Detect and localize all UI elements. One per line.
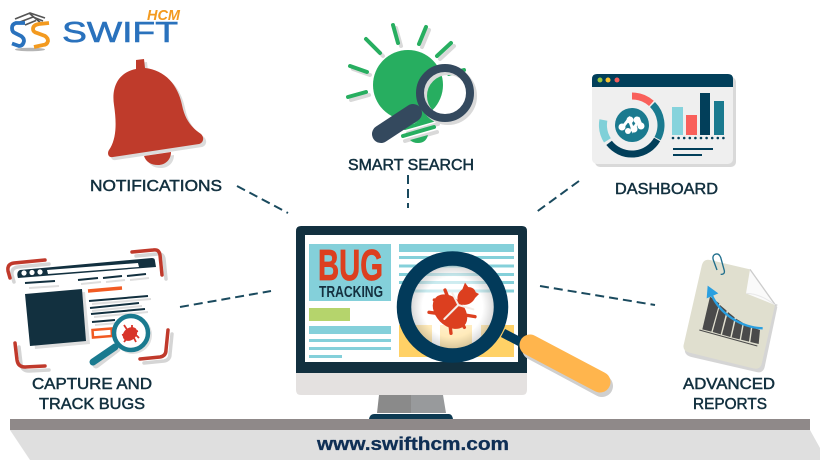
label: advanced reports: REPORTS bbox=[693, 396, 767, 413]
donut chart bbox=[603, 96, 661, 154]
label: smart search: SMART SEARCH bbox=[348, 157, 474, 174]
browser image block bbox=[30, 292, 90, 349]
website url: www.swifthcm.com bbox=[316, 434, 509, 454]
label: capture and track bugs: TRACK BUGS bbox=[39, 396, 145, 413]
label: advanced reports bbox=[683, 376, 775, 413]
large magnifier with bug bbox=[404, 258, 602, 386]
label: advanced reports: ADVANCED bbox=[683, 376, 775, 393]
label: dashboard: DASHBOARD bbox=[615, 181, 718, 198]
icon: dashboard window bbox=[592, 74, 736, 167]
screen: bug tracking banner bbox=[309, 241, 391, 301]
icon: advanced reports document bbox=[683, 254, 777, 372]
logo icon bbox=[12, 13, 49, 51]
desk footer band bbox=[10, 419, 820, 460]
logo: Swift HCM bbox=[12, 7, 180, 51]
dashed connector: dashboard bbox=[535, 181, 579, 213]
label: capture and track bugs: CAPTURE AND bbox=[32, 376, 152, 393]
corner brackets bbox=[12, 254, 172, 371]
icon: notification bell bbox=[108, 59, 206, 168]
monitor stand bbox=[377, 395, 411, 413]
monitor frame bbox=[296, 226, 527, 373]
dashed connector: reports bbox=[540, 286, 655, 305]
dashed connector: capture bbox=[180, 291, 271, 307]
screen: bug tracking banner: BUG bbox=[318, 241, 383, 290]
browser header bbox=[17, 258, 156, 278]
small magnifier with bug bbox=[93, 316, 152, 365]
screen: bug tracking banner: TRACKING bbox=[319, 284, 383, 301]
dashed connector: smart search bbox=[407, 175, 409, 208]
bar chart bbox=[672, 93, 724, 135]
logo HCM: HCM bbox=[147, 7, 180, 24]
paperclip bbox=[713, 254, 724, 274]
logo wordmark: SWIFT bbox=[62, 17, 178, 49]
magnifier lens bbox=[410, 264, 496, 350]
monitor bbox=[296, 226, 527, 419]
icon: smart search bulb and magnifier bbox=[348, 25, 473, 143]
screen: right content bbox=[399, 244, 514, 357]
growth arrow bbox=[712, 295, 763, 328]
label: capture and track bugs bbox=[32, 376, 152, 413]
screen: left content bbox=[309, 308, 391, 358]
dashed connector: notifications bbox=[237, 186, 288, 213]
icon: capture and track bugs bbox=[8, 250, 172, 371]
report bars bbox=[702, 297, 760, 344]
label: notifications: NOTIFICATIONS bbox=[90, 178, 222, 195]
bug bbox=[426, 283, 479, 336]
magnifier handle bbox=[503, 333, 602, 386]
